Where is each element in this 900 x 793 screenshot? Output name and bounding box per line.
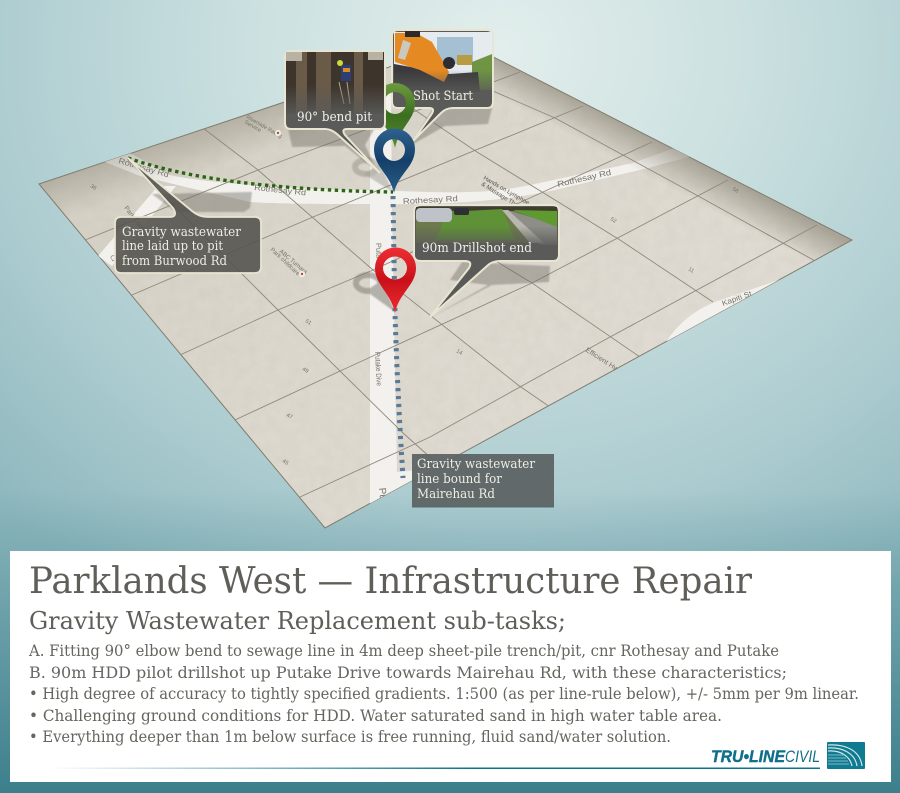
pin: red	[375, 248, 416, 313]
logo: Tru-Line Civil: CIVIL	[785, 748, 820, 766]
map labels: Kapiti St	[721, 288, 754, 308]
map labels: 45	[281, 459, 289, 467]
edge shading	[494, 58, 851, 260]
callout: 90m Drillshot end: 90m Drillshot end	[422, 241, 532, 256]
map labels: 14	[455, 349, 463, 357]
map labels: Park Lane	[122, 205, 146, 233]
callout: Gravity wastewater bound for Mairehau Rd: line bound for	[417, 472, 503, 487]
road: Rothesay Rd	[100, 146, 692, 204]
logo: Tru-Line Civil	[711, 742, 865, 769]
subtitle: Gravity Wastewater Replacement sub-tasks;	[29, 607, 566, 635]
map labels: 52	[609, 217, 617, 225]
task list: • Challenging ground conditions for HDD. Water saturated sand in high water table area.	[29, 707, 722, 725]
callout: Gravity wastewater bound for Mairehau Rd	[412, 454, 554, 508]
map labels: Rothesay Rd	[556, 168, 612, 189]
map labels: Putake Dive	[373, 352, 384, 386]
map labels: 36	[89, 184, 97, 192]
map labels: ABC Tumara	[278, 249, 308, 276]
map labels: Rothesay Rd	[403, 194, 458, 206]
pin: green	[375, 83, 415, 148]
callout: Shot Start: Shot Start	[413, 89, 474, 104]
photo: operator at drill controls	[394, 31, 492, 96]
map labels: Pu	[376, 487, 388, 500]
shadow: pin	[355, 160, 395, 312]
map labels: 11	[687, 267, 695, 275]
map labels: Cl	[108, 254, 117, 263]
task list: • Everything deeper than 1m below surface is free running, fluid sand/water solution.	[29, 728, 671, 746]
dotted line: gravity wastewater Burwood	[128, 158, 393, 192]
map labels: 51	[304, 319, 312, 327]
callout: 90° bend pit	[285, 51, 385, 173]
dotted line: gravity wastewater Putake	[393, 196, 403, 478]
callout: 90° bend pit: 90° bend pit	[297, 110, 373, 125]
title: Parklands West — Infrastructure Repair	[29, 561, 753, 602]
callout: Gravity wastewater laid up to pit: line laid up to pit	[122, 239, 224, 254]
callout: Gravity wastewater laid up to pit: from Burwood Rd	[122, 254, 227, 269]
task list	[28, 642, 859, 746]
road: side street	[98, 186, 176, 266]
map labels: Rothesay Rd	[254, 183, 306, 197]
task list: A. Fitting 90° elbow bend to sewage line in 4m deep sheet-pile trench/pit, cnr Rothesay and Putake	[28, 642, 779, 660]
shadow: callouts	[152, 108, 550, 318]
map: perspective street plan	[30, 40, 860, 535]
photo: sheet-pile pit	[286, 52, 384, 117]
callout: Gravity wastewater bound for Mairehau Rd: Gravity wastewater	[417, 457, 536, 472]
map labels: & Massage The	[480, 182, 519, 209]
map labels: 56	[731, 187, 739, 195]
photo: drillshot end site	[416, 207, 557, 248]
panel: project description	[10, 551, 891, 782]
icon: logo mark	[827, 742, 865, 769]
map labels: 49	[301, 367, 309, 375]
map labels: Hands on Lymphoe	[482, 176, 530, 207]
map labels: Puta	[374, 243, 384, 259]
map labels	[89, 115, 754, 500]
map labels: Service	[243, 120, 262, 134]
map labels: Riverside Rating	[245, 115, 283, 140]
task list: B. 90m HDD pilot drillshot up Putake Drive towards Mairehau Rd, with these characteristics;	[29, 664, 787, 682]
map labels: 47	[285, 413, 293, 421]
pin: blue	[374, 128, 415, 193]
callout: Shot Start	[392, 30, 493, 141]
callout: Gravity wastewater bound for Mairehau Rd: Mairehau Rd	[417, 487, 495, 502]
map labels: Efficient Hw	[584, 347, 620, 374]
map labels: Rothesay Rd	[117, 156, 170, 179]
road: Putake Drive	[370, 93, 412, 504]
callout: 90m Drillshot end	[414, 205, 559, 317]
logo: Tru-Line Civil: TRU•LINE	[711, 748, 786, 766]
line-rule	[49, 768, 820, 769]
map labels: Park childcare	[269, 247, 301, 278]
task list: • High degree of accuracy to tightly specified gradients. 1:500 (as per line-rule below), +/- 5mm per 9m linear.	[29, 685, 859, 703]
callout: Gravity wastewater laid up to pit	[115, 158, 261, 273]
callout: Gravity wastewater laid up to pit: Gravity wastewater	[122, 225, 242, 240]
road: Kapiti St	[666, 280, 780, 342]
